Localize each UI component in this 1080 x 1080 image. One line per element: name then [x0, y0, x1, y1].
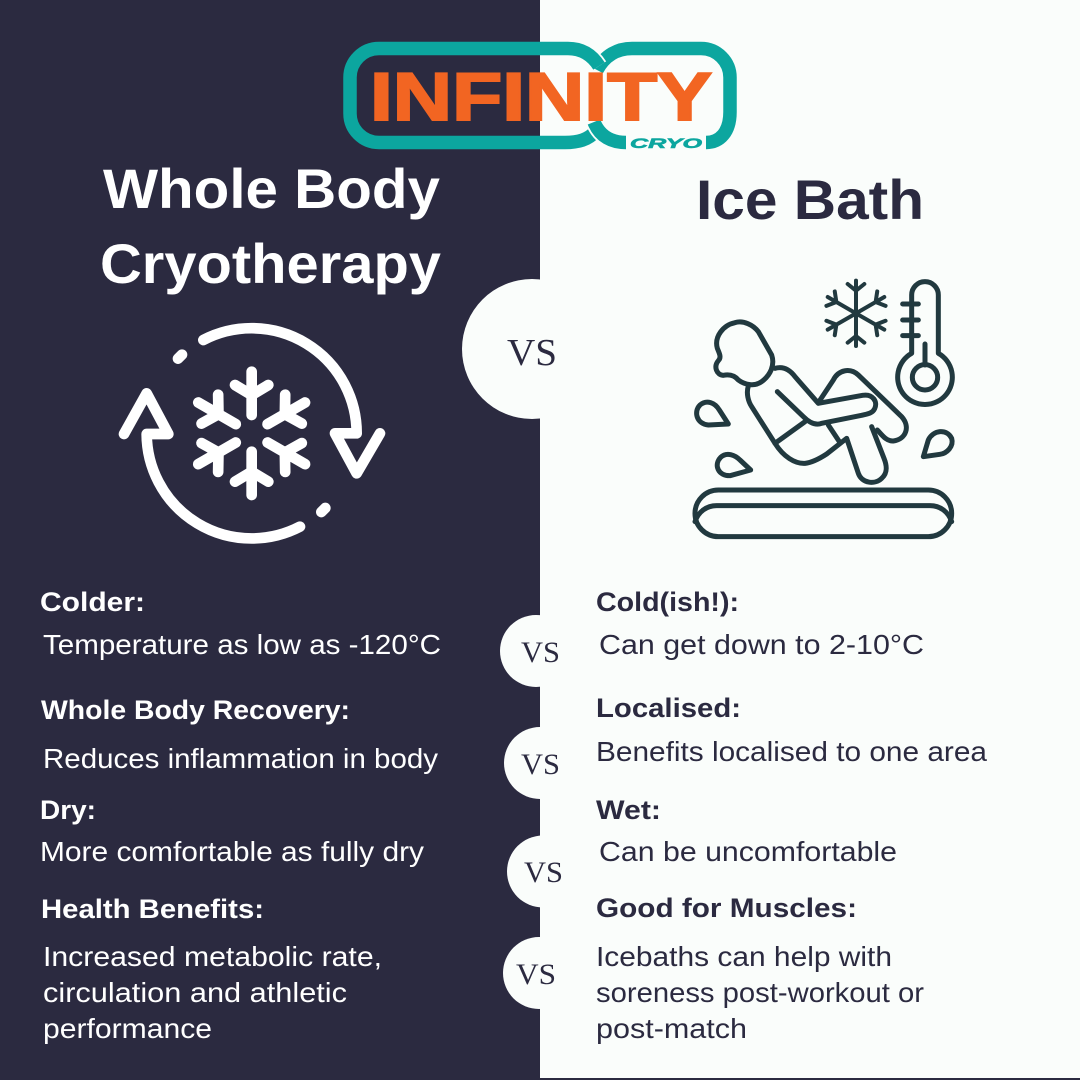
item: Health Benefits: performance	[43, 1013, 212, 1044]
item: Localised: Benefits localised to one area	[596, 736, 987, 767]
heading: Ice Bath: Ice Bath	[696, 168, 924, 231]
item: Health Benefits: Increased metabolic rate,	[43, 941, 382, 972]
item: Cold(ish!): Cold(ish!):	[596, 587, 739, 617]
vs badge: main	[462, 279, 602, 419]
item: Cold(ish!)	[596, 587, 924, 660]
item: Wet: Wet:	[596, 795, 661, 825]
item: Cold(ish!): Can get down to 2-10°C	[599, 629, 924, 660]
icon: small snowflake	[824, 281, 888, 346]
item: Good for Muscles: Icebaths can help with	[596, 941, 892, 972]
icon: water drops	[697, 402, 952, 476]
item: Whole Body Recovery	[41, 695, 438, 774]
vs badge: main: VS	[507, 332, 557, 374]
vs badge: row 3: VS	[524, 856, 563, 889]
vs badge: row 2: VS	[521, 748, 560, 781]
logo left chain link	[350, 48, 599, 142]
heading: Whole Body Cryotherapy: Cryotherapy	[100, 232, 441, 295]
comparison: left column	[40, 587, 441, 1044]
icon: person	[716, 322, 906, 482]
item: Dry: More comfortable as fully dry	[40, 836, 424, 867]
vs badge: row 3	[507, 836, 579, 908]
icon: bath tub	[695, 490, 952, 537]
item: Colder	[40, 587, 441, 660]
item: Dry: Dry:	[40, 795, 96, 825]
item: Dry	[40, 795, 424, 867]
logo link crossing gap	[568, 48, 599, 66]
item: Good for Muscles: post-match	[596, 1013, 747, 1044]
logo wordmark: INFINITY	[370, 59, 712, 135]
panel: left background	[0, 0, 540, 1080]
icon: thermometer	[898, 282, 952, 405]
icon: person in ice bath	[695, 281, 952, 537]
item: Wet	[596, 795, 897, 867]
panel: right background	[540, 0, 1080, 1078]
item: Localised	[596, 693, 987, 767]
vs badge: row 4: VS	[516, 958, 556, 991]
comparison: right column	[596, 587, 987, 1044]
logo right chain link	[597, 48, 730, 142]
item: Good for Muscles: soreness post-workout or	[596, 977, 924, 1008]
item: Whole Body Recovery: Whole Body Recovery:	[41, 695, 350, 725]
logo sub-wordmark: CRYO	[630, 135, 702, 151]
vs badge: row 1	[500, 615, 572, 687]
logo right link lower segment	[594, 122, 626, 142]
vs badge: row 1: VS	[521, 636, 560, 669]
item: Health Benefits: circulation and athletic	[43, 977, 347, 1008]
logo lower crossing gap	[594, 122, 626, 142]
item: Colder: Colder:	[40, 587, 145, 617]
item: Good for Muscles	[596, 893, 924, 1044]
icon: snowflake with rotation arrows	[124, 328, 380, 538]
vs badge: row 2	[504, 727, 576, 799]
logo: Infinity Cryo	[350, 48, 730, 151]
heading: Whole Body Cryotherapy	[100, 157, 441, 295]
item: Health Benefits: Health Benefits:	[41, 894, 264, 924]
item: Health Benefits	[41, 894, 382, 1044]
heading: Whole Body Cryotherapy: Whole Body	[103, 157, 440, 220]
item: Wet: Can be uncomfortable	[599, 836, 897, 867]
vs badge: row 4	[503, 937, 575, 1009]
item: Good for Muscles: Good for Muscles:	[596, 893, 857, 923]
item: Colder: Temperature as low as -120°C	[43, 629, 441, 660]
item: Whole Body Recovery: Reduces inflammation in body	[43, 743, 438, 774]
item: Localised: Localised:	[596, 693, 741, 723]
